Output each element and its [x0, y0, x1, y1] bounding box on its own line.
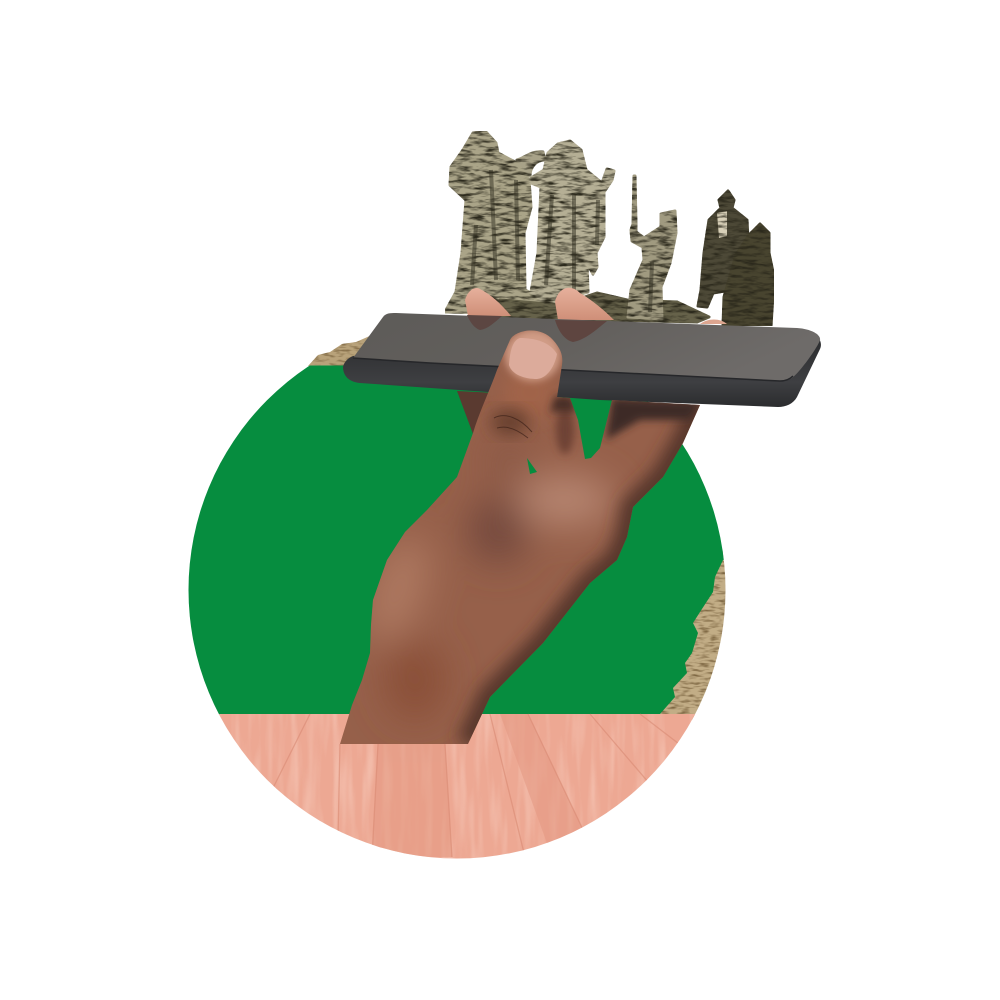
statue: base — [500, 293, 709, 322]
thumb colouring — [510, 382, 558, 410]
soft tonal shading — [370, 462, 618, 716]
green circle backdrop — [180, 366, 735, 715]
shadow along lower right edge — [468, 405, 700, 744]
statue: left figure — [445, 131, 556, 314]
hand — [330, 320, 710, 750]
fingertip: index — [465, 288, 511, 316]
torn paper edge: right — [660, 550, 726, 720]
phone screen — [353, 313, 820, 381]
wooden floor — [219, 714, 695, 858]
hand shape with shading — [330, 320, 710, 750]
finger shadow under phone — [606, 398, 702, 440]
phone — [343, 313, 821, 407]
statue: white shirt — [717, 211, 727, 238]
statue: second figure — [531, 141, 614, 304]
shadowed finger behind thumb — [457, 391, 497, 434]
screen edge line — [353, 358, 793, 381]
fingertip reflection: index — [467, 315, 502, 330]
plank seams — [272, 714, 700, 857]
fingertip: little — [700, 320, 727, 324]
phone body — [343, 336, 821, 407]
statue: small figure — [723, 224, 774, 326]
fingertip reflection: middle — [555, 320, 607, 342]
fingertip: middle — [555, 288, 614, 320]
statue: dark robed figure — [698, 191, 749, 307]
knuckle creases — [494, 416, 532, 438]
statue: robe fold shadows — [472, 170, 652, 312]
statues — [445, 131, 774, 326]
thumbnail — [509, 338, 557, 379]
floor planks — [372, 714, 596, 857]
torn paper edge: top left — [308, 335, 372, 366]
illustration: hand holding phone with statues — [188, 131, 821, 858]
statue: connecting arm — [517, 152, 545, 176]
shadow under phone on middle finger — [550, 396, 576, 412]
statue: sword figure — [628, 176, 676, 319]
gap between thumb and middle finger — [527, 458, 537, 474]
